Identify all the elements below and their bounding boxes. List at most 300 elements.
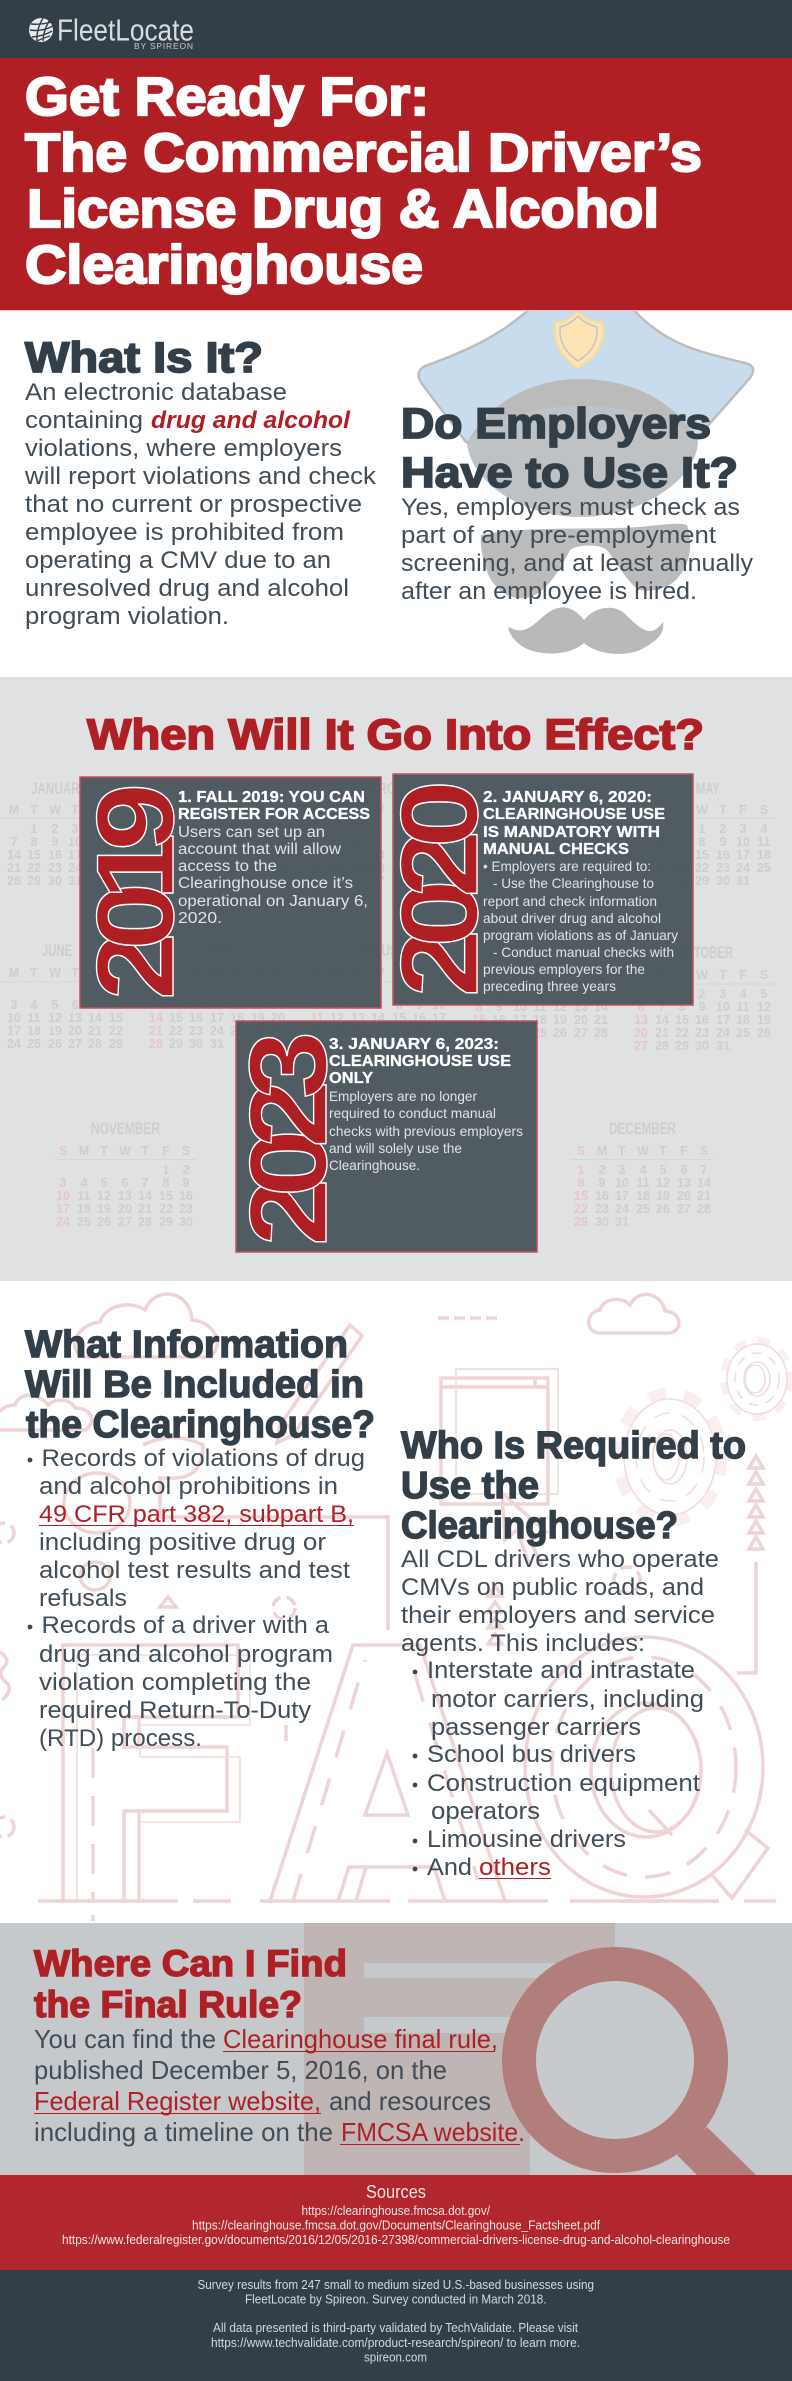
calendar: september: 29 bbox=[472, 1039, 486, 1053]
bullet list: what information bbox=[28, 1445, 365, 1752]
calendar: november: T bbox=[100, 1144, 108, 1158]
calendar: december: DECEMBER bbox=[609, 1119, 676, 1138]
calendar: january: 7 bbox=[11, 835, 18, 849]
calendar: january: 16 bbox=[48, 848, 62, 862]
calendar: october: 17 bbox=[716, 1013, 730, 1027]
calendar: july: 9 bbox=[193, 998, 200, 1012]
calendar: january: 10 bbox=[68, 835, 82, 849]
calendar: october: 1 bbox=[679, 987, 686, 1001]
calendar: january: 8 bbox=[31, 835, 38, 849]
calendar: october: 3 bbox=[720, 987, 727, 1001]
calendar: march: 15 bbox=[412, 848, 426, 862]
background letter F bbox=[304, 1923, 615, 2175]
calendar: december: 4 bbox=[640, 1163, 647, 1177]
calendar: february: SMTWTFS bbox=[152, 803, 282, 817]
text block: what is it: drug and alcohol bbox=[151, 407, 351, 434]
calendar: january: JANUARY bbox=[31, 779, 87, 798]
panel text: 2020: about driver drug and alcohol bbox=[483, 910, 661, 926]
calendar: august: SMTWTFS bbox=[313, 966, 443, 980]
calendar: december: 24 bbox=[615, 1202, 629, 1216]
line art: circuit line bbox=[157, 1517, 388, 1630]
calendar: july: 3 bbox=[214, 985, 221, 999]
calendar: september: 18 bbox=[533, 1013, 547, 1027]
calendar: january: 25 bbox=[88, 861, 102, 875]
calendar: september: 10 bbox=[513, 1000, 527, 1014]
calendar: november: 25 bbox=[77, 1215, 91, 1229]
calendar: december: 28 bbox=[697, 1202, 711, 1216]
calendar: december: 22 bbox=[574, 1202, 588, 1216]
line art: cursor arrow bbox=[502, 1493, 546, 1566]
calendar: december: 7 bbox=[701, 1163, 708, 1177]
calendar: august: 3 bbox=[436, 985, 443, 999]
calendar: april: 9 bbox=[517, 835, 524, 849]
calendar: april: 28 bbox=[472, 874, 486, 888]
text block: what is it: violations, where employers bbox=[25, 435, 342, 462]
heading: what information: the Clearinghouse? bbox=[26, 1404, 375, 1446]
calendar: september: 11 bbox=[533, 1000, 547, 1014]
calendar: march: 3 bbox=[314, 835, 321, 849]
calendar: june: 8 bbox=[113, 998, 120, 1012]
line art: left squiggle bbox=[0, 1652, 9, 1700]
calendar: october: 9 bbox=[699, 1000, 706, 1014]
panel: 2020 bbox=[378, 774, 693, 1005]
title banner: Get Ready For: bbox=[25, 67, 429, 127]
text block: what is it: operating a CMV due to an bbox=[25, 547, 331, 574]
calendar: october: 12 bbox=[757, 1000, 771, 1014]
calendar: june: 3 bbox=[11, 998, 18, 1012]
calendar: april: 19 bbox=[574, 848, 588, 862]
calendar: september: 6 bbox=[578, 987, 585, 1001]
year: 2019: 2019 bbox=[74, 783, 197, 1000]
calendar: november: 16 bbox=[179, 1189, 193, 1203]
calendar: march: 9 bbox=[436, 835, 443, 849]
calendar: february: 4 bbox=[173, 835, 180, 849]
calendar: july: 22 bbox=[169, 1024, 183, 1038]
calendar: december: 20 bbox=[677, 1189, 691, 1203]
calendar: december: 9 bbox=[599, 1176, 606, 1190]
calendar: july: 1 bbox=[173, 985, 180, 999]
calendar background bbox=[0, 779, 776, 1229]
calendar: november: W bbox=[119, 1144, 131, 1158]
calendar: september bbox=[472, 943, 608, 1053]
section: what is it bbox=[24, 334, 377, 630]
calendar: march: 26 bbox=[351, 874, 365, 888]
calendar: april: 26 bbox=[574, 861, 588, 875]
title banner: The Commercial Driver’s bbox=[25, 123, 702, 183]
line art: dash row bbox=[438, 1316, 500, 1320]
calendar: may: 13 bbox=[655, 848, 669, 862]
calendar: november: 3 bbox=[60, 1176, 67, 1190]
calendar: october: 19 bbox=[757, 1013, 771, 1027]
calendar: august: 26 bbox=[330, 1037, 344, 1051]
calendar: october: 20 bbox=[634, 1026, 648, 1040]
calendar: october: 30 bbox=[695, 1039, 709, 1053]
line art: connector bbox=[737, 1562, 756, 1673]
calendar: february: 19 bbox=[189, 861, 203, 875]
line art: triangles column bbox=[749, 1456, 763, 1549]
calendar: april: 27 bbox=[594, 861, 608, 875]
panel heading: 2019: 1. FALL 2019: YOU CAN bbox=[178, 789, 365, 806]
panel text: 2020: - Conduct manual checks with bbox=[493, 944, 674, 960]
text block: do employers: screening, and at least annually bbox=[401, 550, 753, 577]
calendar: july: JULY bbox=[203, 941, 233, 960]
calendar: august: 4 bbox=[314, 998, 321, 1012]
line art: right cloud bbox=[589, 1294, 679, 1333]
calendar: november: 19 bbox=[97, 1202, 111, 1216]
text block: what is it: containing bbox=[25, 407, 143, 434]
calendar: may: 11 bbox=[757, 835, 771, 849]
calendar: march: 19 bbox=[351, 861, 365, 875]
calendar: april: 15 bbox=[492, 848, 506, 862]
calendar: july: 26 bbox=[251, 1024, 265, 1038]
panel heading: 2023 bbox=[329, 1036, 511, 1087]
line art: left top cloud bbox=[75, 1294, 217, 1357]
calendar: january: 4 bbox=[92, 822, 99, 836]
calendar: september: 4 bbox=[537, 987, 544, 1001]
calendar: october bbox=[634, 943, 776, 1053]
year: 2020: 2020 bbox=[378, 780, 501, 997]
bullet list: what information: Records of violations of drug bbox=[42, 1445, 365, 1472]
calendar: january: 18 bbox=[88, 848, 102, 862]
calendar: january: 15 bbox=[27, 848, 41, 862]
calendar: january: 26 bbox=[109, 861, 123, 875]
calendar: december: W bbox=[637, 1144, 649, 1158]
calendar: november: T bbox=[141, 1144, 149, 1158]
line art: road marks bbox=[93, 1725, 286, 1921]
calendar: may: 24 bbox=[736, 861, 750, 875]
calendar: march: 4 bbox=[334, 835, 341, 849]
calendar: december: 26 bbox=[656, 1202, 670, 1216]
calendar: november: 29 bbox=[159, 1215, 173, 1229]
panel heading: 2019: REGISTER FOR ACCESS bbox=[178, 806, 370, 823]
panel text: 2023: required to conduct manual bbox=[329, 1105, 496, 1121]
calendar: october: 27 bbox=[634, 1039, 648, 1053]
calendar: november: 24 bbox=[56, 1215, 70, 1229]
sources list: https://www.federalregister.gov/documents/2016/12/05/2016-27398/commercial-drivers-license-drug-and-alcohol-clearinghouse bbox=[62, 2233, 730, 2247]
calendar: july: SMTWTFS bbox=[152, 966, 282, 980]
calendar: june: JUNE bbox=[42, 941, 72, 960]
calendar: july: 15 bbox=[169, 1011, 183, 1025]
calendar: july: 7 bbox=[153, 998, 160, 1012]
calendar: february: 2 bbox=[275, 822, 282, 836]
calendar: december: 3 bbox=[619, 1163, 626, 1177]
calendar: june bbox=[0, 941, 125, 1051]
calendar: june: 13 bbox=[68, 1011, 82, 1025]
calendar: december: 15 bbox=[574, 1189, 588, 1203]
calendar: july: 18 bbox=[230, 1011, 244, 1025]
calendar: july: 8 bbox=[173, 998, 180, 1012]
calendar: july: 29 bbox=[169, 1037, 183, 1051]
calendar: october: 15 bbox=[675, 1013, 689, 1027]
text block: what is it: employee is prohibited from bbox=[25, 519, 344, 546]
calendar: november: 17 bbox=[56, 1202, 70, 1216]
calendar: march: 27 bbox=[371, 874, 385, 888]
calendar: august: 6 bbox=[355, 998, 362, 1012]
logo wordmark: FleetLocate bbox=[57, 12, 194, 48]
calendar: september: 14 bbox=[594, 1000, 608, 1014]
calendar: february: 24 bbox=[149, 874, 163, 888]
calendar: january: 29 bbox=[27, 874, 41, 888]
calendar: april: 17 bbox=[533, 848, 547, 862]
calendar: september: 12 bbox=[553, 1000, 567, 1014]
text block: who is required: agents. This includes: bbox=[401, 1630, 645, 1657]
calendar: may: 25 bbox=[757, 861, 771, 875]
calendar: november bbox=[54, 1119, 196, 1229]
calendar: november: 9 bbox=[183, 1176, 190, 1190]
calendar: december: S bbox=[700, 1144, 708, 1158]
icon: FleetLocate globe bbox=[29, 18, 53, 42]
calendar: august: 18 bbox=[310, 1024, 324, 1038]
calendar: february: 5 bbox=[193, 835, 200, 849]
calendar: june: 12 bbox=[48, 1011, 62, 1025]
calendar: november: 8 bbox=[163, 1176, 170, 1190]
calendar: february: 27 bbox=[210, 874, 224, 888]
bullet list: who is required: Limousine drivers bbox=[427, 1826, 626, 1853]
calendar: december: 17 bbox=[615, 1189, 629, 1203]
calendar: december: 5 bbox=[660, 1163, 667, 1177]
calendar: june: 1 bbox=[113, 985, 120, 999]
calendar: may: 30 bbox=[716, 874, 730, 888]
text block: where can I find: Clearinghouse final rule, bbox=[223, 2024, 498, 2054]
calendar: august: 10 bbox=[432, 998, 446, 1012]
calendar: november: 13 bbox=[118, 1189, 132, 1203]
calendar: march: 23 bbox=[432, 861, 446, 875]
calendar: may bbox=[634, 779, 776, 888]
header bar with logo bbox=[0, 0, 792, 58]
calendar: february: 20 bbox=[210, 861, 224, 875]
calendar: july: 20 bbox=[271, 1011, 285, 1025]
calendar: april: 22 bbox=[492, 861, 506, 875]
calendar: march: 6 bbox=[375, 835, 382, 849]
calendar: november: 27 bbox=[118, 1215, 132, 1229]
calendar: september: 15 bbox=[472, 1013, 486, 1027]
calendar: may: 6 bbox=[659, 835, 666, 849]
calendar: september: 13 bbox=[574, 1000, 588, 1014]
calendar: may: 15 bbox=[695, 848, 709, 862]
calendar: march: 10 bbox=[310, 848, 324, 862]
calendar: april: 24 bbox=[533, 861, 547, 875]
calendar: april: 7 bbox=[476, 835, 483, 849]
text block: do employers: Yes, employers must check as bbox=[401, 494, 740, 521]
calendar: june: 26 bbox=[48, 1037, 62, 1051]
sources list bbox=[62, 2204, 730, 2247]
text block: what is it: unresolved drug and alcohol bbox=[25, 575, 349, 602]
text block: what is it bbox=[24, 379, 377, 630]
bullet list: what information: drug and alcohol program bbox=[39, 1641, 333, 1668]
calendar: april: SMTWTFS bbox=[475, 803, 605, 817]
sources heading: Sources bbox=[366, 2182, 426, 2202]
calendar: august: 19 bbox=[330, 1024, 344, 1038]
panel text: 2023: Employers are no longer bbox=[329, 1088, 477, 1104]
line art: small triangles bbox=[488, 1586, 502, 1644]
calendar: september: 9 bbox=[496, 1000, 503, 1014]
calendar: may: 14 bbox=[675, 848, 689, 862]
text block: where can I find: published December 5, 2016, on the bbox=[34, 2055, 447, 2085]
calendar: march: 12 bbox=[351, 848, 365, 862]
panel text: 2019: account that will allow bbox=[178, 841, 342, 858]
calendar: june: 6 bbox=[72, 998, 79, 1012]
year: 2023: 2023 bbox=[227, 1031, 350, 1246]
bullet list: who is required: others bbox=[479, 1854, 551, 1881]
calendar: november: 7 bbox=[142, 1176, 149, 1190]
heading: who is required: Who Is Required to bbox=[401, 1425, 746, 1467]
calendar: november: 18 bbox=[77, 1202, 91, 1216]
calendar: june: 4 bbox=[31, 998, 38, 1012]
text block: where can I find: FMCSA website. bbox=[341, 2117, 525, 2147]
title banner: Clearinghouse bbox=[25, 235, 423, 295]
calendar: march: 11 bbox=[330, 848, 344, 862]
calendar: january: 14 bbox=[7, 848, 21, 862]
bullet list: who is required: passenger carriers bbox=[431, 1714, 641, 1741]
calendar: march: 28 bbox=[392, 874, 406, 888]
footer text bbox=[198, 2277, 594, 2364]
calendar: september: 27 bbox=[574, 1026, 588, 1040]
title banner: License Drug & Alcohol bbox=[27, 179, 659, 239]
panel heading: 2020: CLEARINGHOUSE USE bbox=[483, 806, 665, 823]
calendar: april: 30 bbox=[513, 874, 527, 888]
calendar: november: 22 bbox=[159, 1202, 173, 1216]
calendar: july: 23 bbox=[189, 1024, 203, 1038]
panel text: 2020: program violations as of January bbox=[483, 927, 678, 943]
calendar: may: SMTWTFS bbox=[637, 803, 768, 817]
calendar: october: 14 bbox=[655, 1013, 669, 1027]
calendar: april: 18 bbox=[553, 848, 567, 862]
calendar: march: 18 bbox=[330, 861, 344, 875]
calendar: july: 21 bbox=[149, 1024, 163, 1038]
panel: 2019 bbox=[74, 777, 381, 1008]
calendar: august: 25 bbox=[310, 1037, 324, 1051]
calendar: december: 18 bbox=[636, 1189, 650, 1203]
line art: pencil bbox=[277, 1325, 362, 1443]
calendar: june: 14 bbox=[88, 1011, 102, 1025]
panel text: 2023: Clearinghouse. bbox=[329, 1157, 420, 1173]
line art: small gear bbox=[724, 1341, 790, 1417]
calendar: january: 3 bbox=[72, 822, 79, 836]
line art: dashed circles bbox=[0, 1523, 640, 1837]
calendar: may: 26 bbox=[634, 874, 648, 888]
calendar: november: 14 bbox=[138, 1189, 152, 1203]
calendar: march: 25 bbox=[330, 874, 344, 888]
calendar: september: 1 bbox=[476, 987, 483, 1001]
calendar: march: 20 bbox=[371, 861, 385, 875]
bullet list: what information: required Return-To-Duty bbox=[39, 1697, 311, 1724]
logo wordmark: BY SPIREON bbox=[134, 41, 193, 51]
calendar: july: 13 bbox=[271, 998, 285, 1012]
text block: where can I find: You can find the bbox=[34, 2024, 216, 2054]
calendar: may: 1 bbox=[699, 822, 706, 836]
calendar: october: 22 bbox=[675, 1026, 689, 1040]
calendar: april: 12 bbox=[574, 835, 588, 849]
calendar: may: 18 bbox=[757, 848, 771, 862]
bullet list: what information: alcohol test results and test bbox=[39, 1557, 350, 1584]
calendar: december: 8 bbox=[578, 1176, 585, 1190]
calendar: march: 5 bbox=[355, 835, 362, 849]
calendar: february: 15 bbox=[251, 848, 265, 862]
calendar: november: M bbox=[79, 1144, 89, 1158]
calendar: february: 13 bbox=[210, 848, 224, 862]
calendar: february: 21 bbox=[230, 861, 244, 875]
bullet list: who is required: And bbox=[427, 1854, 472, 1881]
calendar: march: 1 bbox=[416, 822, 423, 836]
footer bbox=[0, 2270, 792, 2381]
calendar: october: 2 bbox=[699, 987, 706, 1001]
heading: who is required bbox=[401, 1425, 746, 1547]
calendar: may: 9 bbox=[720, 835, 727, 849]
panel text: 2020: - Use the Clearinghouse to bbox=[493, 875, 654, 891]
sources list: https://clearinghouse.fmcsa.dot.gov/ bbox=[302, 2204, 490, 2218]
text block: who is required bbox=[401, 1546, 719, 1657]
calendar: february: 8 bbox=[255, 835, 262, 849]
section: do employers have to use it bbox=[401, 400, 753, 605]
calendar: june: 10 bbox=[7, 1011, 21, 1025]
heading: what information bbox=[25, 1324, 375, 1446]
calendar: january: 2 bbox=[52, 822, 59, 836]
line art: browser window bbox=[441, 1369, 558, 1504]
calendar: january: 28 bbox=[7, 874, 21, 888]
calendar: may: 4 bbox=[761, 822, 768, 836]
calendar: august: 24 bbox=[432, 1024, 446, 1038]
heading: when will it go into effect: When Will It Go Into Effect? bbox=[87, 711, 704, 759]
bullet list: what information: and alcohol prohibitions in bbox=[39, 1473, 338, 1500]
calendar: august: 23 bbox=[412, 1024, 426, 1038]
text block: what is it: that no current or prospective bbox=[25, 491, 362, 518]
calendar: july: 17 bbox=[210, 1011, 224, 1025]
calendar: march: 8 bbox=[416, 835, 423, 849]
calendar: march: 24 bbox=[310, 874, 324, 888]
calendar: february: 26 bbox=[189, 874, 203, 888]
calendar: august: 21 bbox=[371, 1024, 385, 1038]
calendar: december: T bbox=[618, 1144, 626, 1158]
calendar: june: 17 bbox=[7, 1024, 21, 1038]
calendar: february: 12 bbox=[189, 848, 203, 862]
calendar: october: 4 bbox=[740, 987, 747, 1001]
text block: do employers bbox=[401, 494, 753, 605]
calendar: july: 16 bbox=[189, 1011, 203, 1025]
calendar: november: S bbox=[182, 1144, 190, 1158]
heading: what information: Will Be Included in bbox=[25, 1364, 364, 1406]
calendar: march bbox=[310, 779, 446, 901]
calendar: october: 5 bbox=[761, 987, 768, 1001]
bullet list: who is required: Construction equipment bbox=[427, 1770, 700, 1797]
panel text: 2019: access to the bbox=[178, 858, 277, 875]
calendar: february: 22 bbox=[251, 861, 265, 875]
calendar: october: 28 bbox=[655, 1039, 669, 1053]
calendar: december: T bbox=[659, 1144, 667, 1158]
calendar: march: MARCH bbox=[360, 779, 404, 798]
footer text: FleetLocate by Spireon. Survey conducted in March 2018. bbox=[245, 2292, 546, 2306]
calendar: september: 3 bbox=[517, 987, 524, 1001]
bullet list: what information: including positive drug or bbox=[39, 1529, 326, 1556]
bullet list: what information: refusals bbox=[39, 1585, 127, 1612]
calendar: february bbox=[149, 779, 285, 888]
panel text: 2020: previous employers for the bbox=[483, 961, 645, 977]
calendar: august: 9 bbox=[416, 998, 423, 1012]
calendar: july: 4 bbox=[234, 985, 241, 999]
line art: key shapes bbox=[64, 1438, 203, 1607]
calendar: july: 24 bbox=[210, 1024, 224, 1038]
panel text: 2019 bbox=[178, 824, 368, 927]
calendar: august: 7 bbox=[375, 998, 382, 1012]
panel heading: 2020: IS MANDATORY WITH bbox=[483, 824, 660, 841]
calendar: may: 16 bbox=[716, 848, 730, 862]
calendar: october: 11 bbox=[736, 1000, 750, 1014]
calendar: october: 26 bbox=[757, 1026, 771, 1040]
calendar: november: 15 bbox=[159, 1189, 173, 1203]
panel text: 2019: Clearinghouse once it’s bbox=[178, 875, 353, 892]
calendar: april: 8 bbox=[496, 835, 503, 849]
calendar: march: 22 bbox=[412, 861, 426, 875]
calendar: january bbox=[0, 779, 125, 888]
